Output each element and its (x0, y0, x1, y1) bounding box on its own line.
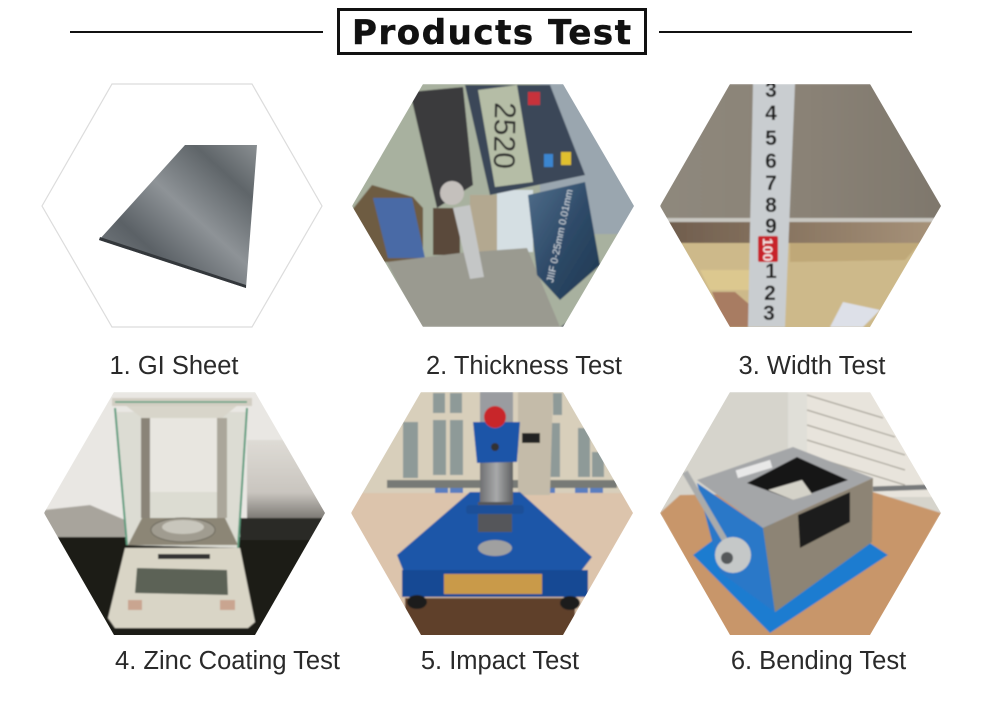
icon: measuring tape: 6 (765, 150, 777, 173)
panel: thickness test photo (352, 84, 640, 327)
icon: measuring tape: 3 (765, 79, 777, 102)
title: Products Test (352, 13, 631, 53)
icon: micrometer (410, 85, 600, 300)
icon: micrometer: 2520 (487, 102, 521, 169)
icon: measuring tape: 7 (765, 172, 777, 195)
panel: GI sheet (42, 84, 322, 327)
title (70, 10, 912, 54)
icon: measuring tape (748, 79, 795, 327)
label: thickness test: 2. Thickness Test (426, 352, 622, 380)
icon: measuring tape: 100 (760, 238, 776, 262)
label: GI sheet: 1. GI Sheet (110, 352, 238, 380)
label: impact test: 5. Impact Test (421, 647, 579, 675)
icon: analytical balance (108, 398, 255, 628)
panel: impact test photo (351, 392, 634, 638)
icon: measuring tape: 1 (765, 260, 777, 283)
icon: micrometer: JIIF 0-25mm 0.01mm (545, 188, 576, 284)
icon: bending tester (685, 447, 928, 633)
icon: measuring tape: 4 (765, 102, 777, 125)
icon: measuring tape: 3 (763, 302, 775, 325)
icon: measuring tape: 5 (765, 127, 777, 150)
panel: width test photo (660, 79, 942, 333)
label: width test: 3. Width Test (739, 352, 885, 380)
icon: impact tester (397, 392, 592, 610)
icon: measuring tape: 8 (765, 194, 777, 217)
icon: measuring tape: 9 (765, 215, 777, 238)
panel: zinc coating test photo (44, 392, 327, 637)
label: bending test: 6. Bending Test (731, 647, 906, 675)
label: zinc coating test: 4. Zinc Coating Test (115, 647, 340, 675)
icon: galvanized sheet (99, 145, 257, 288)
panel: bending test photo (660, 392, 942, 640)
icon: measuring tape: 2 (764, 282, 776, 305)
